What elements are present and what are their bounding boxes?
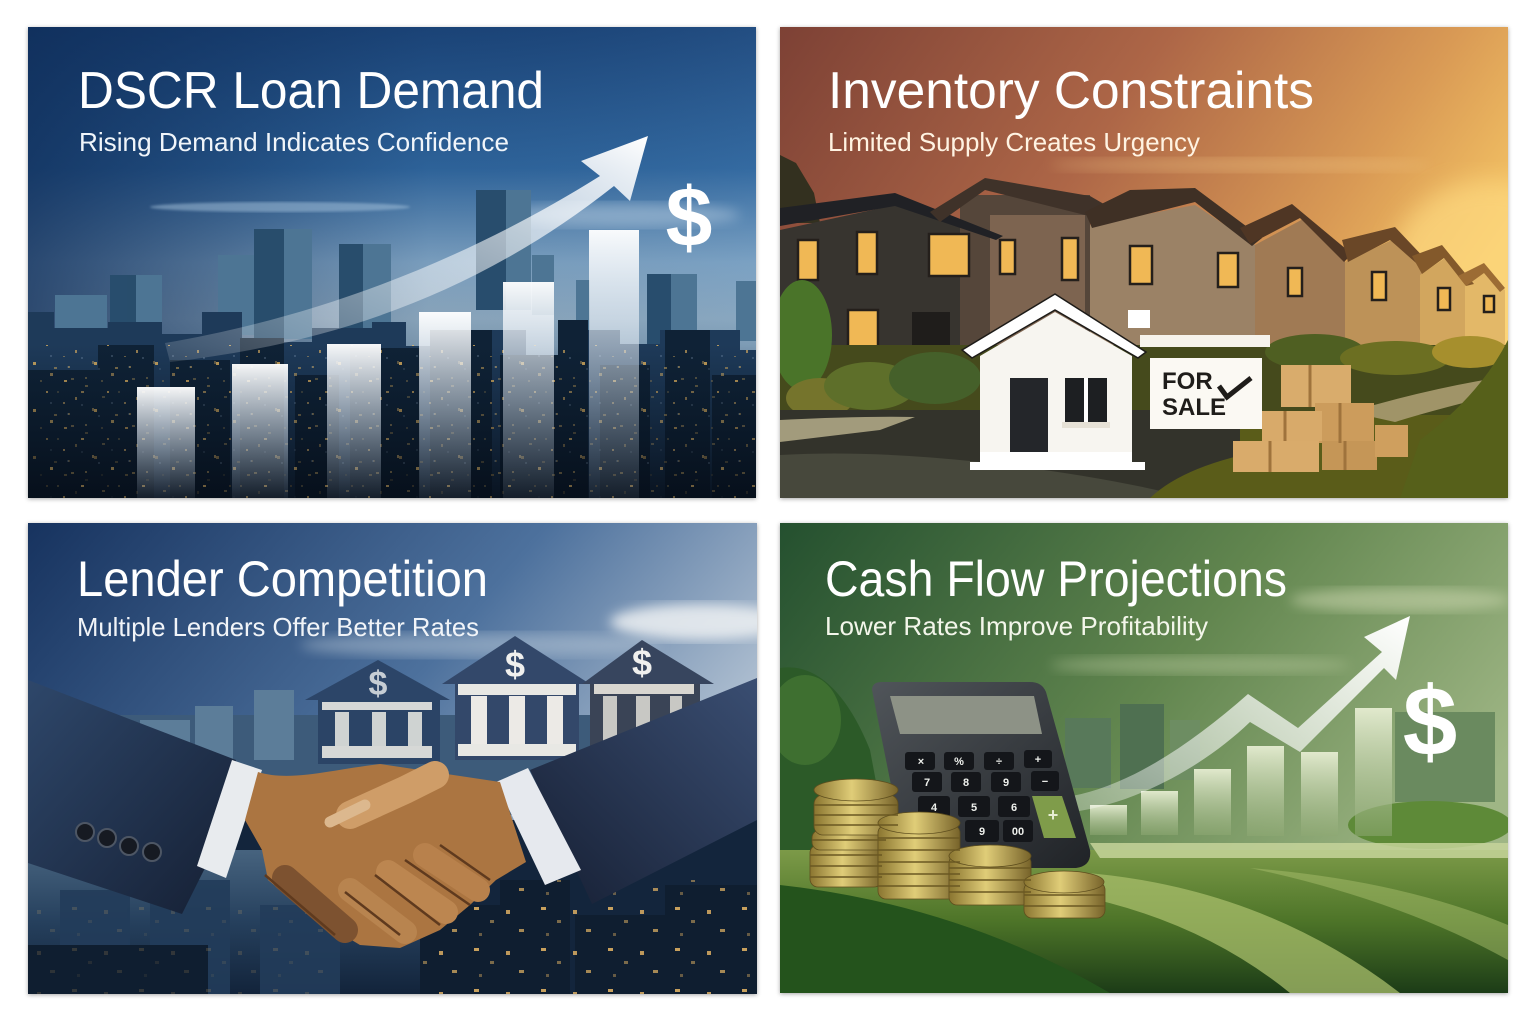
heading: Lender Competition <box>77 551 488 607</box>
shrubs and lawn <box>772 280 1508 498</box>
city skyline <box>28 190 756 498</box>
icon: bank buildings <box>305 636 714 764</box>
bar chart <box>137 230 639 498</box>
icon: calculator: − <box>1042 776 1048 788</box>
icon: calculator: × <box>918 756 924 768</box>
icon: rising arrow <box>1072 616 1410 812</box>
lawn <box>780 843 1508 993</box>
city skyline <box>28 690 757 994</box>
icon: calculator <box>872 682 1090 868</box>
panel: Cash Flow Projections <box>769 523 1512 993</box>
icon: dollar sign: $ <box>666 170 712 264</box>
icon: bank buildings: $ <box>369 665 388 703</box>
subheading: Lower Rates Improve Profitability <box>825 611 1208 641</box>
icon: calculator: + <box>1035 754 1041 766</box>
heading: Inventory Constraints <box>828 62 1314 120</box>
icon: calculator: 4 <box>931 802 938 814</box>
icon: handshake <box>28 678 757 948</box>
icon: calculator: 9 <box>1003 777 1009 789</box>
icon: calculator: % <box>954 756 964 768</box>
panel: Lender Competition <box>28 523 790 994</box>
icon: calculator: 8 <box>963 777 969 789</box>
heading: Cash Flow Projections <box>825 551 1287 607</box>
for sale sign: FOR <box>1162 368 1213 395</box>
panel: Inventory Constraints <box>772 27 1536 498</box>
icon: white house <box>962 294 1146 470</box>
icon: rising arrow <box>165 136 648 362</box>
heading: DSCR Loan Demand <box>78 62 544 120</box>
subheading: Limited Supply Creates Urgency <box>828 127 1200 157</box>
subheading: Rising Demand Indicates Confidence <box>79 127 509 157</box>
icon: bank buildings: $ <box>505 644 525 685</box>
icon: calculator: 9 <box>979 826 985 838</box>
icon: dollar sign: $ <box>1403 666 1457 776</box>
subheading: Multiple Lenders Offer Better Rates <box>77 612 479 642</box>
icon: calculator: + <box>1048 805 1058 825</box>
icon: calculator: 5 <box>971 802 977 814</box>
icon: coin stacks <box>810 779 1105 918</box>
icon: calculator: 6 <box>1011 802 1017 814</box>
for sale sign: SALE <box>1162 394 1226 421</box>
icon: bank buildings: $ <box>632 642 652 683</box>
icon: calculator: ÷ <box>996 756 1002 768</box>
icon: calculator: 00 <box>1012 826 1024 838</box>
for sale sign <box>1128 310 1270 429</box>
icon: calculator: 7 <box>924 777 930 789</box>
row of houses <box>780 178 1505 356</box>
panel: DSCR Loan Demand <box>25 25 759 502</box>
skyline and trees <box>780 668 1508 850</box>
icon: stacked boxes <box>1233 365 1408 472</box>
bar chart <box>1090 708 1392 836</box>
